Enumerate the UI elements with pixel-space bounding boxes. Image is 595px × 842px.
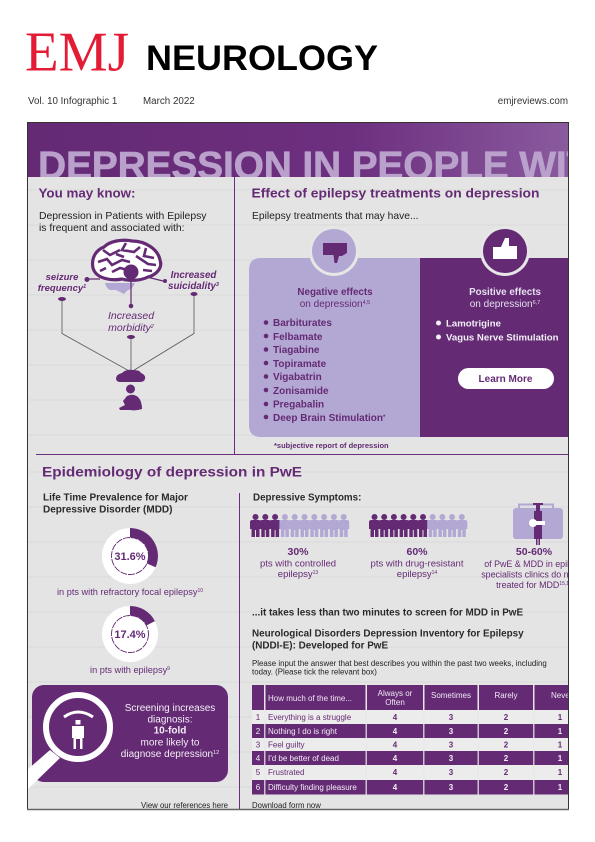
table rows: 1 [558,713,563,722]
table rows: Difficulty finding pleasure [268,783,357,792]
stat: 50-60%: treated for MDD [496,580,572,590]
table rows: 3 [256,740,261,750]
table rows: 2 [504,713,509,722]
date: March 2022 [143,96,195,107]
list: negative treatments: Deep Brain Stimulation [273,413,383,424]
prevalence heading: Life Time Prevalence for Major [43,492,188,504]
converging lines to person [58,292,198,372]
button: learn more: Learn More [479,374,533,385]
table rows: 2 [504,768,509,777]
stat: 60%: 60% [406,546,428,558]
label: increased morbidity: morbidity [108,322,154,334]
callout text: 12 [213,750,219,756]
panel: depressive symptoms [250,492,591,590]
table rows: 3 [449,713,454,722]
donut: 17.4%: 17.4% [114,629,146,641]
stat: 30%: pts with controlled [260,558,336,570]
table rows: 4 [393,713,398,722]
caption: refractory: 10 [197,588,203,594]
donut: 31.6%: 31.6% [114,551,146,563]
icon: sad person [119,384,142,410]
table rows: Nothing I do is right [268,727,338,736]
list: negative treatments: Topiramate [273,359,327,370]
list: positive treatments: Vagus Nerve Stimulation [446,332,559,344]
caption: epilepsy: in pts with epilepsy [90,665,167,675]
table rows: 2 [504,727,509,736]
NDDI-E heading: (NDDI-E): Developed for PwE [252,640,388,652]
stat: 50-60%: of PwE & MDD in epilepsy [484,559,588,569]
heading: effect of treatments: Effect of epilepsy treatments on depression [252,186,540,200]
table rows: Feel guilty [268,740,304,750]
table rows: 4 [393,783,398,792]
panel: effect of epilepsy treatments [249,186,568,450]
pictogram: 30% [250,514,349,537]
screening lead-in: ...it takes less than two minutes to screen for MDD in PwE [252,608,523,618]
list: negative treatments: Tiagabine [273,345,320,356]
stat: 60%: 14 [432,570,437,576]
table rows: Frustrated [268,768,304,777]
table: NDDI-E [252,685,573,795]
table rows: 5 [256,768,261,777]
heading: epidemiology: Epidemiology of depression in PwE [42,464,302,480]
table rows: 1 [558,740,563,750]
positive effects heading: Positive effects [469,287,541,298]
negative effects heading: 4,5 [363,300,370,306]
table rows: 4 [256,754,261,763]
list: positive treatments: Lamotrigine [446,318,501,330]
table header: Never [551,691,573,700]
table rows: 1 [558,783,563,792]
stat: 50-60%: 50-60% [516,546,552,558]
panel: positive effects [420,226,568,437]
caption: refractory: in pts with refractory focal epilepsy [57,587,197,597]
caption: epilepsy: 9 [167,666,170,672]
table rows: 4 [393,754,398,763]
table rows: Everything is a struggle [268,713,352,722]
label: increased morbidity: Increased [108,310,154,322]
table rows: 6 [256,783,261,792]
table header: How much of the time... [268,694,352,703]
symptoms heading: Depressive Symptoms: [253,492,361,504]
stat: 60%: epilepsy [397,569,437,580]
callout text: more likely to [141,738,200,748]
stat: 30%: 13 [313,570,318,576]
table rows: 3 [449,754,454,763]
icon: magnifier with person [27,695,110,790]
issue line: Vol. 10 Infographic 1 [28,96,117,107]
table rows: 1 [558,727,563,736]
label: seizure frequency: frequency [38,283,86,294]
button: learn more [458,368,554,389]
positive effects heading: on depression [470,299,540,310]
stat: 30%: epilepsy [278,569,318,580]
donut: 17.4% [102,606,158,662]
list: negative treatments: * [383,415,386,421]
intro: treatments: Epilepsy treatments that may have... [252,211,419,222]
website: emjreviews.com [498,96,568,107]
table rows: 3 [449,740,454,750]
list: positive treatments [436,320,558,342]
stat: 50-60%: 15,16 [559,581,572,587]
table header: Often [385,698,405,707]
table rows: 4 [393,768,398,777]
label: increased suicidality: suicidality [168,281,219,292]
negative effects heading: on depression [300,299,370,310]
table rows: 2 [504,740,509,750]
table rows: 1 [558,754,563,763]
footnote: *subjective report of depression [274,441,389,450]
icon: thumbs down [309,226,359,276]
callout text: Screening increases [125,703,215,714]
callout text: diagnosis: [147,714,193,726]
table rows: 2 [504,754,509,763]
label: seizure frequency: seizure [46,272,78,283]
title banner [28,123,568,177]
table header [252,685,573,710]
icon: cloud [116,370,145,382]
link: download form: Download form now [252,801,321,810]
intro text: is frequent and associated with: [39,223,185,234]
positive effects heading: 6,7 [533,300,540,306]
table rows: 3 [449,727,454,736]
connector lines: brain to outcomes [85,277,166,308]
table rows [252,685,568,795]
pictogram: 60% [369,514,467,537]
table rows: 1 [558,768,563,777]
link: references: View our references here [141,801,228,810]
label: increased suicidality: Increased [171,270,216,281]
list: negative treatments: Felbamate [273,332,323,343]
stat: 30%: 30% [287,546,309,558]
heading: you may know: You may know: [38,186,136,200]
NDDI-E instructions: today. (Please tick the relevant box) [252,668,377,676]
list: negative treatments: Barbiturates [273,318,332,329]
panel: negative effects [249,226,420,437]
donut: 31.6% [102,528,158,584]
list: negative treatments: Zonisamide [273,386,329,397]
table rows: 2 [504,783,509,792]
callout: screening [27,685,228,790]
label: increased suicidality: 3 [216,282,219,288]
table header: Always or [378,689,412,698]
infographic frame [27,122,595,810]
list: negative treatments [264,318,386,424]
panel: lifetime prevalence [43,492,203,675]
intro text: Depression in Patients with Epilepsy [39,211,206,222]
prevalence heading: Depressive Disorder (MDD) [43,504,172,516]
negative effects heading: Negative effects [297,287,373,298]
icon: medical case with syringe [513,503,563,545]
table rows: 4 [393,740,398,750]
table rows: 4 [393,727,398,736]
list: negative treatments: Vigabatrin [273,372,322,383]
table rows: I'd be better of dead [268,754,339,763]
table rows: 2 [256,727,261,736]
table rows: 3 [449,783,454,792]
label: seizure frequency: 1 [83,284,86,290]
table header: Sometimes [431,691,471,700]
callout text: 10-fold [154,726,186,736]
label: increased morbidity: 2 [150,324,154,330]
stat: 50-60%: specialists clinics do not get [481,570,591,580]
list: negative treatments: Pregabalin [273,400,324,410]
callout text: diagnose depression [121,749,219,760]
journal name: Neurology: NEUROLOGY [146,39,378,78]
table rows: 3 [449,768,454,777]
logo: EMJ: EMJ [25,22,129,84]
panel: you may know [38,186,219,410]
table rows: 1 [256,713,261,722]
icon: thumbs up [480,226,530,276]
icon: brain [93,240,161,294]
stat: 60%: pts with drug-resistant [371,558,464,570]
NDDI-E instructions: Please input the answer that best describes you within the past two weeks, including [252,659,547,668]
table header: Rarely [494,691,518,700]
NDDI-E heading: Neurological Disorders Depression Inventory for Epilepsy [252,628,524,640]
